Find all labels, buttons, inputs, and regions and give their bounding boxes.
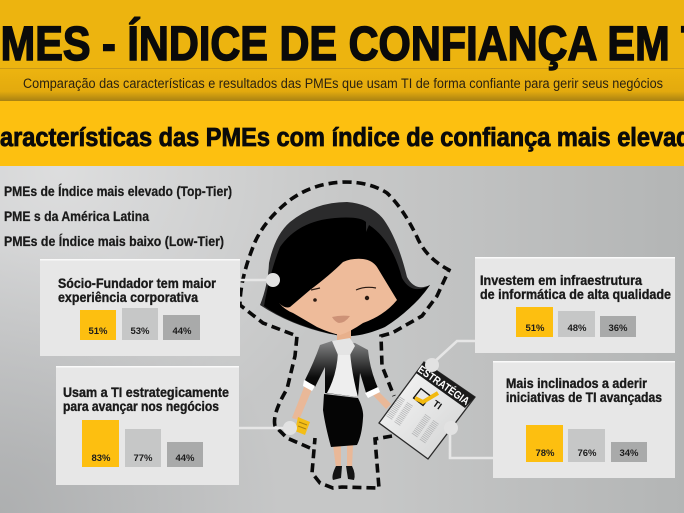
panel: mais inclinados: iniciativas de TI avançadas: [506, 389, 662, 405]
TI label: TI: [430, 398, 444, 412]
bar chart: [526, 425, 647, 462]
panel: sócio-fundador: Sócio-Fundador tem maior: [58, 275, 216, 291]
yellow check: [415, 393, 438, 402]
checkbox: [414, 389, 430, 405]
collar: [332, 338, 355, 355]
jacket: [305, 341, 378, 397]
yellow card: [295, 417, 310, 435]
bar chart: 44%: [175, 453, 195, 464]
bar chart: 53%: [130, 326, 150, 337]
legend: [4, 184, 232, 249]
bar chart: 36%: [608, 323, 628, 334]
character outline: dashed: [240, 182, 449, 488]
document: ESTRATÉGIA: [379, 362, 475, 459]
legs: [333, 445, 353, 468]
background: grey main area: [0, 166, 684, 513]
hair: [260, 202, 430, 336]
legend: PMEs de Índice mais baixo (Low-Tier): [4, 234, 224, 249]
panel: usam a TI: para avançar nos negócios: [63, 398, 219, 414]
panel: mais inclinados: [493, 361, 675, 478]
bar chart: 34%: [619, 448, 639, 459]
black band: [416, 362, 475, 408]
panel: mais inclinados: Mais inclinados a aderir: [506, 375, 647, 391]
bar chart: 44%: [172, 326, 192, 337]
panel: usam a TI: [56, 366, 239, 485]
bar chart: 51%: [525, 323, 545, 334]
bar chart: 48%: [567, 323, 587, 334]
band label: ESTRATÉGIA: [415, 363, 472, 408]
bar chart: [82, 420, 203, 467]
panel: sócio-fundador: [40, 259, 240, 356]
connector dots: [266, 273, 458, 435]
panel: usam a TI: Usam a TI estrategicamente: [63, 384, 229, 400]
paper sheet: [379, 362, 475, 459]
panel: investem em infraestrutura: Investem em infraestrutura: [480, 272, 642, 288]
panel: investem em infraestrutura: [475, 257, 675, 353]
text lines: [389, 398, 436, 442]
panel: sócio-fundador: experiência corporativa: [58, 289, 198, 305]
connector lines: [239, 280, 493, 458]
bar chart: 77%: [133, 453, 153, 464]
legend: PME s da América Latina: [4, 209, 149, 224]
bar chart: 51%: [88, 326, 108, 337]
bar chart: 83%: [91, 453, 111, 464]
arms: [292, 382, 391, 420]
character: businesswoman: [260, 202, 430, 480]
bar chart: [80, 308, 200, 340]
shoes: [332, 466, 355, 480]
section heading band: [0, 101, 684, 166]
bar chart: 76%: [577, 448, 597, 459]
bar chart: 78%: [535, 448, 555, 459]
shirt: [327, 352, 358, 397]
bar chart: [516, 307, 636, 337]
legend: PMEs de Índice mais elevado (Top-Tier): [4, 184, 232, 199]
header band: [0, 0, 684, 101]
neck: [337, 330, 351, 344]
skirt: [323, 394, 363, 447]
face: [279, 259, 397, 335]
cuffs: [303, 380, 380, 398]
eyes and mouth: [311, 287, 376, 323]
